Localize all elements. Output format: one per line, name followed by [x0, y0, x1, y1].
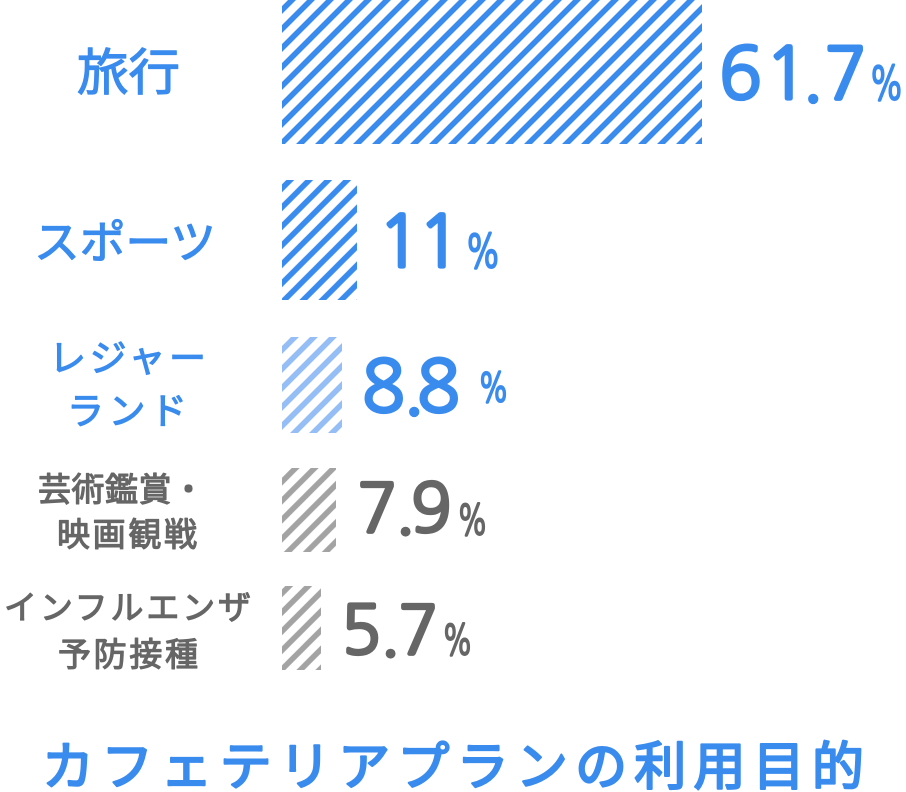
label: influenza: インフルエンザ [4, 581, 251, 629]
bar: influenza [282, 586, 321, 670]
value: art appreciation: 7.9 [357, 475, 452, 542]
bar: leisure land [282, 337, 342, 433]
value: sports: % [465, 229, 501, 275]
row: travel [77, 0, 904, 144]
label: leisure land: レジャー [49, 328, 206, 382]
label: leisure land [49, 328, 206, 435]
bar: art appreciation [282, 468, 336, 552]
bar: travel [282, 0, 702, 144]
value: leisure land: % [478, 368, 509, 408]
label: art appreciation [38, 463, 205, 556]
label: leisure land: ランド [67, 381, 187, 435]
row: sports [34, 180, 501, 300]
value: leisure land: 8.8 [362, 352, 460, 423]
value: sports: 11 [378, 207, 461, 278]
value: influenza: 5.7 [341, 597, 439, 664]
value: leisure land [362, 352, 509, 423]
label: influenza [4, 581, 251, 676]
bar: sports [282, 180, 357, 300]
label: travel: 旅行 [77, 33, 180, 105]
row: influenza [4, 581, 473, 676]
label: influenza: 予防接種 [58, 628, 198, 676]
value: art appreciation: % [457, 500, 488, 541]
label: art appreciation: 芸術鑑賞・ [38, 463, 205, 511]
label: art appreciation: 映画観戦 [57, 508, 197, 556]
value: travel: 61.7 [719, 39, 867, 110]
row: art appreciation [38, 463, 488, 556]
value: influenza: % [442, 620, 473, 661]
row: leisure land [49, 328, 509, 435]
label: sports: スポーツ [34, 206, 216, 271]
value: sports [378, 207, 501, 278]
